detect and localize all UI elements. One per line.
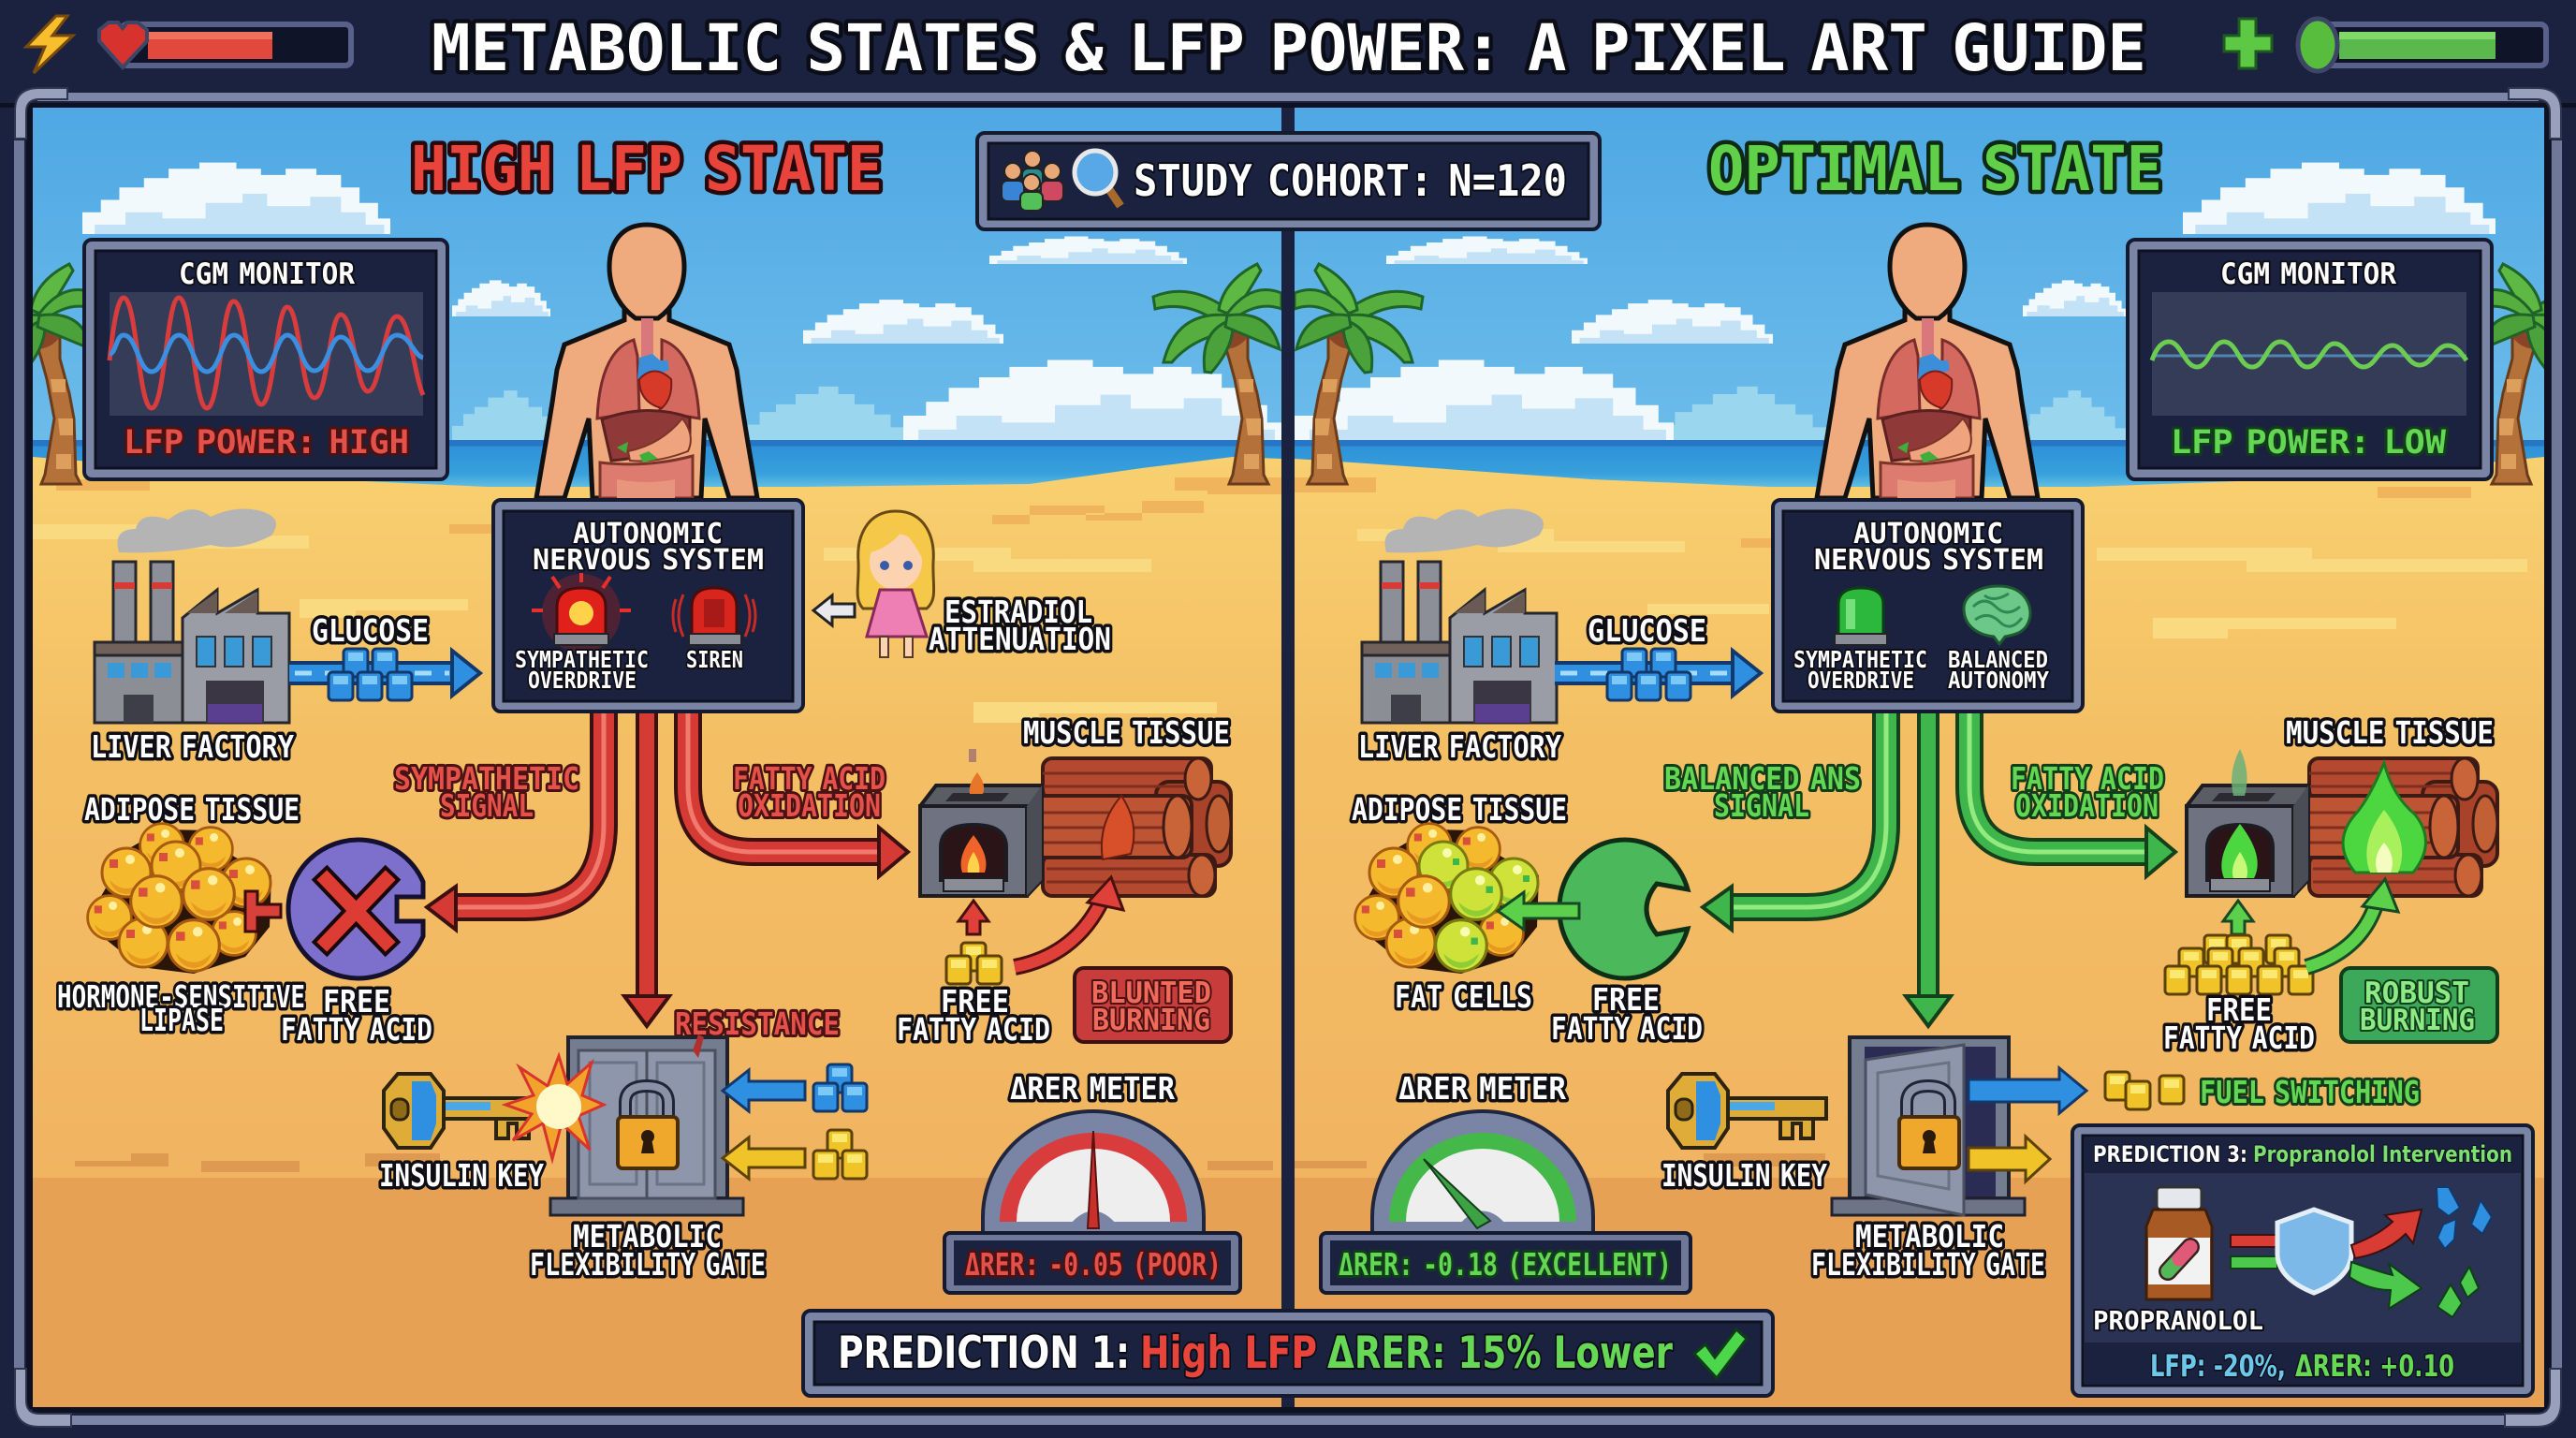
icon: open metabolic gate — [1832, 1037, 2025, 1215]
arrows: green signal pipes — [1703, 712, 2175, 1026]
siren labels: SYMPATHETIC — [1793, 646, 1927, 673]
label: metabolic flexibility gate left — [530, 1218, 766, 1283]
icon: insulin key, right — [1668, 1074, 1826, 1148]
arrows: red signal pipes — [427, 712, 908, 1026]
cohort text: STUDY COHORT: N=120 — [1134, 155, 1567, 206]
panel: autonomic nervous system, optimal — [1773, 500, 2083, 712]
label: fuel switching: FUEL SWITCHING — [2200, 1074, 2420, 1110]
arrow: green down — [2349, 1262, 2422, 1309]
label: free fatty acid adipose, right: FREE — [1592, 981, 1660, 1018]
label: hormone-sensitive lipase: LIPASE — [139, 1002, 224, 1038]
arrows and fuel blocked, left — [723, 1064, 867, 1179]
icon: green brain — [1964, 586, 2030, 644]
label: fatty acid oxidation, left: FATTY ACID — [733, 760, 886, 797]
prediction 3 result — [2150, 1348, 2454, 1384]
panel: CGM monitor, high LFP — [84, 240, 447, 479]
label: metabolic flexibility gate right — [1811, 1218, 2045, 1283]
panel: prediction 1: ΔRER: 15% Lower — [1327, 1328, 1674, 1379]
header: right plus icon and energy bar — [2224, 19, 2546, 71]
icon: impact spark — [505, 1056, 604, 1159]
readout: poor RER: ΔRER: -0.05 (POOR) — [965, 1246, 1222, 1283]
callout: blunted burning — [1075, 968, 1231, 1042]
arrow: nuggets to furnace, left — [959, 901, 988, 934]
label: free fatty acid adipose, right: FATTY ACID — [1551, 1010, 1703, 1047]
palm trees — [0, 264, 2576, 484]
readout: excellent RER — [1321, 1233, 1690, 1293]
panel: prediction 1 — [803, 1311, 1773, 1396]
icon: muscle logs and furnace, blunted — [920, 749, 1231, 896]
figure: human body, high LFP — [536, 225, 757, 498]
label: fatty acid oxidation, left: OXIDATION — [738, 787, 881, 824]
icon: green siren — [1835, 588, 1887, 645]
health bar: green — [2298, 19, 2546, 71]
icon: siren — [673, 588, 755, 645]
icon: propranolol bottle — [2146, 1187, 2212, 1299]
label: resistance: RESISTANCE — [675, 1005, 840, 1042]
arrow: estradiol to nervous system — [813, 595, 855, 625]
label: glucose left: GLUCOSE — [312, 612, 429, 649]
label: propranolol: PROPRANOLOL — [2093, 1305, 2263, 1336]
label: free fatty acid adipose, left: FREE — [323, 983, 390, 1020]
arrow: red up — [2351, 1210, 2422, 1258]
heading: optimal state: OPTIMAL STATE — [1708, 133, 2162, 205]
icon: liver factory, high LFP — [95, 509, 289, 723]
icon: fat cell cluster, left — [88, 824, 271, 974]
siren labels: SYMPATHETIC — [515, 646, 649, 673]
icon: magnifier — [1075, 151, 1120, 206]
label: metabolic flexibility gate right: METABOLIC — [1855, 1218, 2004, 1255]
arrow: curved to muscle, right — [2306, 879, 2398, 967]
panel: autonomic nervous system, high LFP: OVERDRIVE — [528, 667, 637, 694]
panel: study cohort — [977, 133, 1600, 229]
gauge: poor RER — [983, 1111, 1204, 1233]
label: metabolic flexibility gate left: FLEXIBILITY GATE — [530, 1246, 766, 1283]
title: METABOLIC STATES & LFP POWER: A PIXEL ART GUIDE — [432, 11, 2146, 86]
panel: autonomic nervous system, optimal: AUTONOMY — [1948, 667, 2049, 694]
readout: excellent RER: ΔRER: -0.18 (EXCELLENT) — [1339, 1246, 1672, 1283]
label: insulin key left: INSULIN KEY — [379, 1157, 544, 1194]
label: free fatty acid muscle, left: FREE — [941, 983, 1009, 1020]
label: fatty acid oxidation, left — [733, 760, 886, 824]
icon: glowing siren — [532, 573, 631, 653]
label: fatty acid oxidation, right: FATTY ACID — [2011, 760, 2164, 797]
icon: check mark — [1694, 1329, 1747, 1378]
panel: autonomic nervous system, high LFP — [493, 500, 803, 712]
header: left energy icon and health bar — [26, 16, 351, 73]
icon: liver factory, optimal — [1362, 509, 1557, 723]
prediction 3 result: LFP: -20%, — [2150, 1348, 2286, 1384]
label: free fatty acid adipose, left — [281, 983, 432, 1048]
callout: blunted burning: BURNING — [1092, 1004, 1210, 1037]
callout: robust burning: ROBUST — [2364, 976, 2469, 1010]
label: metabolic flexibility gate right: FLEXIBILITY GATE — [1811, 1246, 2045, 1283]
figure: estradiol girl — [857, 511, 934, 657]
prediction 3 header: PREDICTION 3: — [2093, 1141, 2247, 1167]
panel: prediction 3 — [2072, 1125, 2533, 1396]
monitor reading: LFP POWER: HIGH — [124, 424, 409, 462]
chart: low amplitude wave — [2152, 292, 2466, 416]
panel: autonomic nervous system, high LFP: NERVOUS SYSTEM — [533, 544, 764, 577]
label: estradiol attenuation: ATTENUATION — [929, 621, 1111, 657]
label: adipose tissue left: ADIPOSE TISSUE — [84, 791, 300, 828]
label: muscle tissue right: MUSCLE TISSUE — [2286, 714, 2494, 751]
label: estradiol attenuation: ESTRADIOL — [944, 594, 1092, 630]
label: free fatty acid muscle, left: FATTY ACID — [897, 1011, 1050, 1048]
icon: blue gems — [2437, 1187, 2492, 1249]
gauge: excellent RER — [1372, 1111, 1593, 1233]
label: metabolic flexibility gate left: METABOLIC — [573, 1218, 722, 1255]
label: glucose right: GLUCOSE — [1588, 612, 1706, 649]
label: RER meter left: ΔRER METER — [1010, 1070, 1175, 1107]
label: free fatty acid muscle, right: FATTY ACID — [2163, 1020, 2315, 1056]
label: estradiol attenuation — [929, 594, 1111, 657]
icon: few free fatty acids — [946, 943, 1002, 984]
icon: locked metabolic gate — [550, 1034, 743, 1215]
panel: CGM monitor, low LFP — [2128, 240, 2492, 479]
chart: high amplitude wave — [110, 292, 423, 416]
label: fatty acid oxidation, right — [2011, 760, 2164, 824]
icon: spark core — [536, 1084, 581, 1129]
panel: autonomic nervous system, high LFP: SIREN — [686, 646, 743, 673]
icon: muscle logs and furnace, robust — [2187, 749, 2497, 896]
label: hormone-sensitive lipase — [57, 978, 305, 1038]
callout: blunted burning: BLUNTED — [1091, 976, 1211, 1010]
label: balanced ANS signal: SIGNAL — [1714, 787, 1809, 824]
label: fatty acid oxidation, right: OXIDATION — [2015, 787, 2159, 824]
label: fat cells: FAT CELLS — [1395, 978, 1532, 1015]
arrow: curved to muscle, left — [1015, 877, 1123, 967]
arrows: fuel passing through open gate — [1969, 1068, 2184, 1181]
icon: lightning bolt — [26, 16, 73, 73]
panel: prediction 1: High LFP — [1140, 1328, 1317, 1379]
prediction 3 result: ΔRER: +0.10 — [2295, 1348, 2454, 1384]
health bar: red — [99, 22, 351, 67]
label: adipose tissue right: ADIPOSE TISSUE — [1352, 791, 1567, 828]
arrow: glucose to nervous system, left — [289, 649, 480, 700]
panel: autonomic nervous system, optimal: OVERDRIVE — [1808, 667, 1914, 694]
label: insulin key right: INSULIN KEY — [1661, 1157, 1827, 1194]
label: free fatty acid adipose, left: FATTY ACID — [281, 1011, 432, 1048]
icon: green gems — [2437, 1267, 2479, 1317]
label: balanced ANS signal: BALANCED ANS — [1664, 760, 1861, 797]
icon: active enzyme — [1559, 840, 1688, 978]
arrow: nuggets to furnace, right — [2223, 901, 2253, 934]
icon: people group — [1002, 151, 1063, 211]
icon: shield — [2277, 1210, 2351, 1293]
panel title: AUTONOMIC — [1853, 518, 2003, 550]
monitor reading: LFP POWER: LOW — [2171, 424, 2447, 462]
icon: insulin key, left — [384, 1074, 542, 1148]
icon: inhibition marker — [245, 891, 281, 932]
icon: green plus — [2224, 19, 2272, 68]
label: sympathetic signal: SIGNAL — [440, 787, 534, 824]
callout: robust burning: BURNING — [2360, 1004, 2475, 1037]
label: liver factory right: LIVER FACTORY — [1358, 728, 1561, 765]
label: hormone-sensitive lipase: HORMONE-SENSITIVE — [57, 978, 305, 1015]
clouds — [82, 163, 2496, 440]
callout: robust burning — [2341, 968, 2497, 1042]
label: liver factory left: LIVER FACTORY — [91, 728, 294, 765]
figure: human body, optimal — [1817, 225, 2038, 498]
icon: hormone-sensitive lipase blocked — [288, 840, 423, 978]
panel title: AUTONOMIC — [573, 518, 723, 550]
icon: many free fatty acids — [2165, 935, 2313, 994]
label: sympathetic signal — [394, 760, 579, 824]
monitor title: CGM MONITOR — [179, 257, 355, 291]
label: RER meter right: ΔRER METER — [1398, 1070, 1566, 1107]
label: free fatty acid adipose, right — [1551, 981, 1703, 1047]
icon: fat cell cluster, right — [1355, 824, 1539, 974]
arrow: enzyme to fat cells — [1498, 892, 1579, 930]
heading: high LFP state: HIGH LFP STATE — [411, 133, 883, 205]
label: free fatty acid muscle, right — [2163, 991, 2315, 1056]
label: free fatty acid muscle, left — [897, 983, 1050, 1048]
panel: autonomic nervous system, optimal: BALANCED — [1948, 646, 2048, 673]
prediction text: PREDICTION 1: — [838, 1328, 1130, 1379]
label: muscle tissue left: MUSCLE TISSUE — [1023, 714, 1230, 751]
arrow: glucose to nervous system, right — [1555, 649, 1761, 700]
icon: beta blocker bars — [2231, 1235, 2277, 1269]
readout: poor RER — [944, 1233, 1240, 1293]
label: free fatty acid muscle, right: FREE — [2206, 991, 2272, 1028]
monitor title: CGM MONITOR — [2220, 257, 2396, 291]
panel: autonomic nervous system, optimal: NERVOUS SYSTEM — [1814, 544, 2043, 577]
label: balanced ANS signal — [1664, 760, 1861, 824]
panel: prediction 3: Propranolol Intervention — [2253, 1141, 2512, 1167]
label: sympathetic signal: SYMPATHETIC — [394, 760, 579, 797]
